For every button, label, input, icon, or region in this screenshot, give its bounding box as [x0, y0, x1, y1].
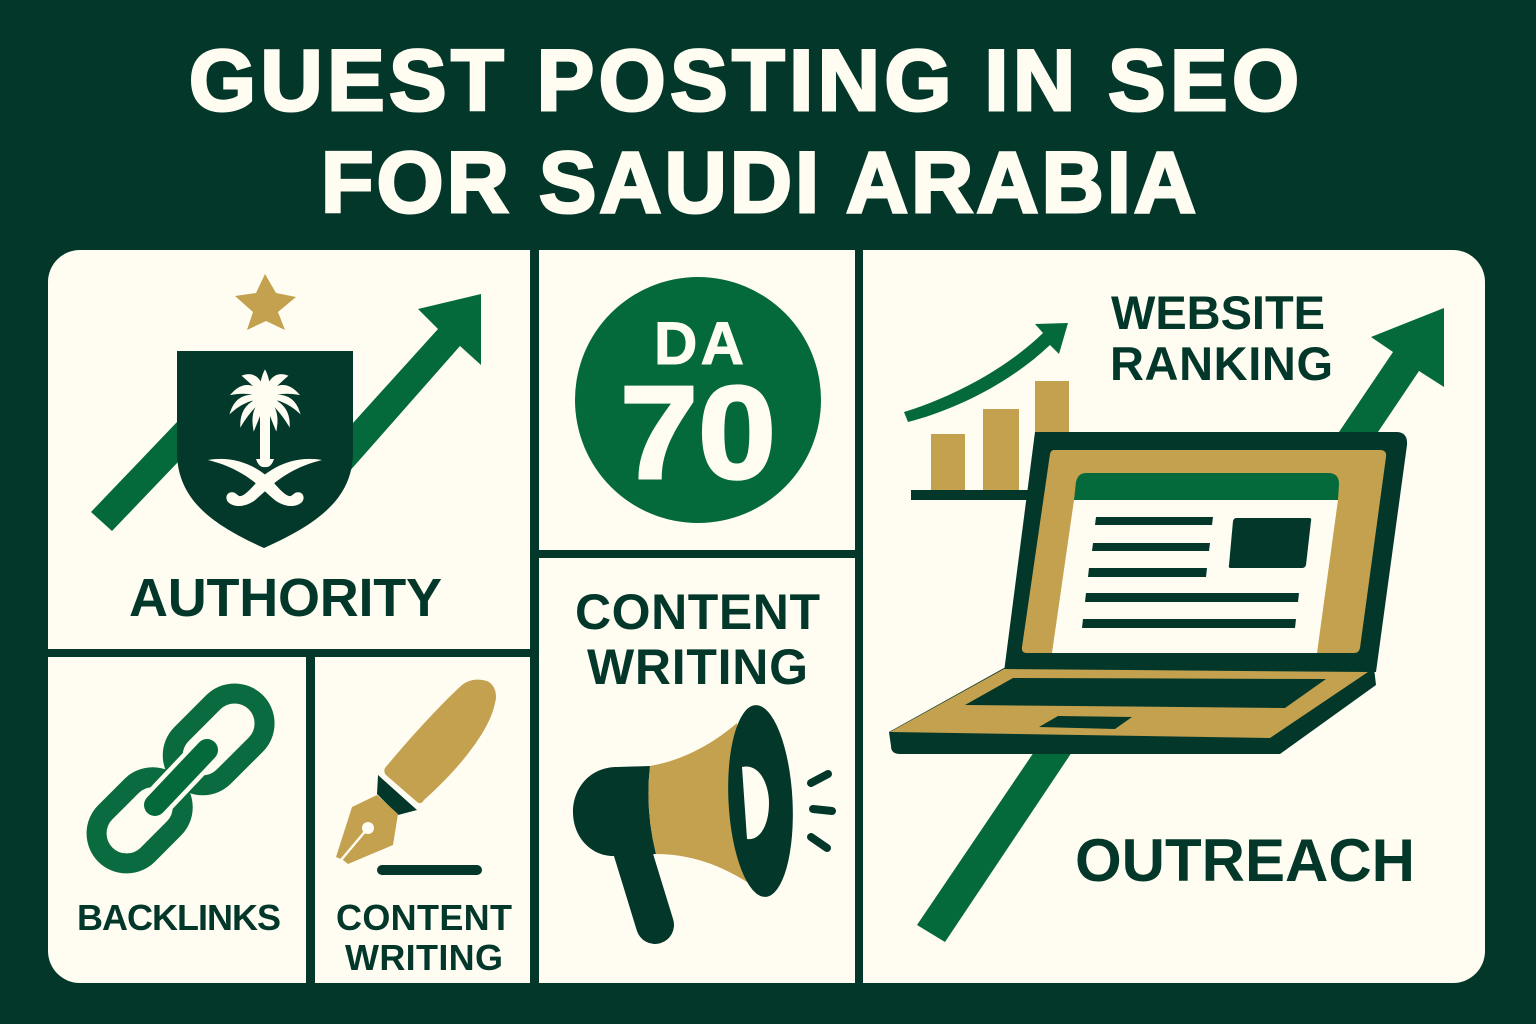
chart: bars [911, 381, 1069, 500]
icon: star [235, 274, 296, 330]
title [189, 33, 1299, 231]
icon: shield with palm and swords [177, 351, 353, 548]
panel: authority [91, 274, 481, 628]
icon: large arrow [917, 308, 1444, 942]
label: outreach: OUTREACH [1075, 827, 1415, 894]
icon: laptop [889, 432, 1407, 754]
icon: megaphone [573, 703, 832, 925]
panel: content writing megaphone [573, 584, 832, 925]
icon: chain links [84, 681, 277, 876]
label: content writing: WRITING [587, 639, 808, 695]
label: website ranking: WEBSITE [1111, 286, 1325, 339]
icon: growth arrow [91, 294, 481, 531]
label: authority: AUTHORITY [129, 568, 442, 628]
label: content writing: CONTENT [336, 897, 512, 938]
label: backlinks: BACKLINKS [77, 897, 281, 938]
panel: card background [48, 250, 1485, 983]
panel: content writing small [336, 680, 512, 978]
panel: DA 70 [575, 277, 821, 523]
badge circle [575, 277, 821, 523]
label: website ranking [1110, 286, 1333, 390]
label: website ranking: RANKING [1110, 337, 1333, 390]
title: FOR SAUDI ARABIA [321, 135, 1196, 231]
icon: fountain pen [336, 680, 496, 870]
label: content writing: WRITING [345, 937, 503, 978]
panel: website ranking and outreach [889, 286, 1444, 942]
label: content writing [575, 584, 820, 695]
icon: small arrow [904, 323, 1068, 422]
label: content writing [336, 897, 512, 978]
number: 70: 70 [620, 359, 776, 506]
label: DA: DA [654, 310, 744, 377]
panel: backlinks [77, 681, 281, 938]
title: GUEST POSTING IN SEO [189, 33, 1299, 129]
label: content writing: CONTENT [575, 584, 820, 640]
